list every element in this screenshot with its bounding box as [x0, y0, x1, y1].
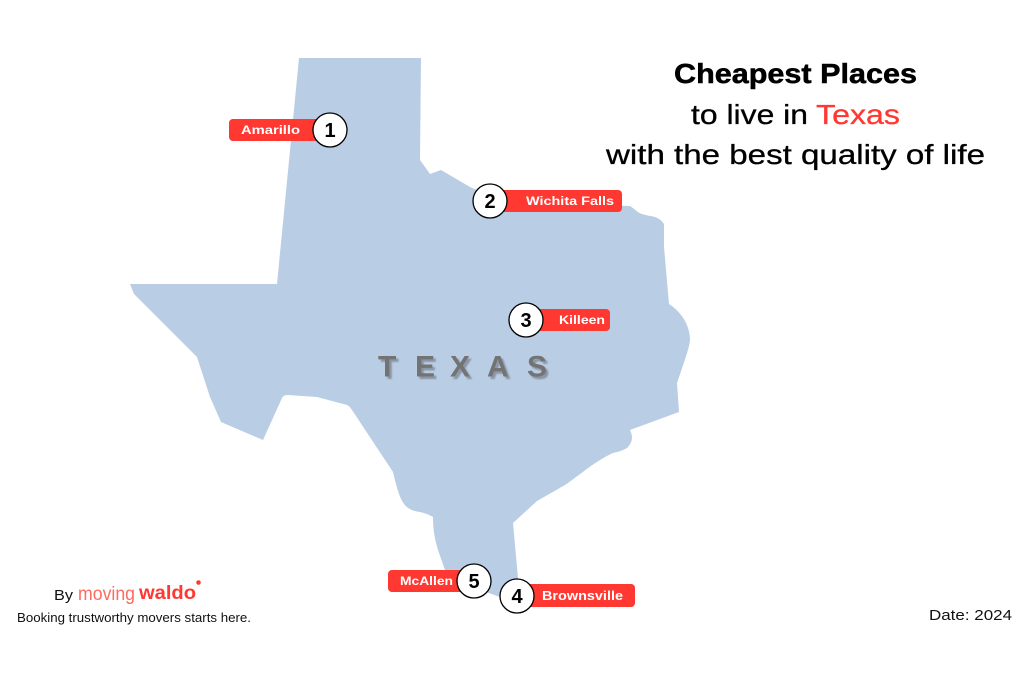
title: Texas — [816, 99, 900, 130]
marker 5: McAllen: 5 — [468, 571, 480, 593]
date: Date: 2024 — [929, 607, 1012, 624]
marker 1: Amarillo — [229, 113, 347, 147]
brand logo: By moving waldo: waldo — [138, 583, 196, 604]
marker 3: Killeen — [509, 303, 610, 337]
title: to live in — [691, 99, 808, 130]
marker 4: Brownsville: Brownsville — [542, 589, 623, 603]
brand logo: By moving waldo — [54, 580, 201, 605]
title: with the best quality of life — [605, 139, 985, 170]
marker 3: Killeen: 3 — [520, 310, 532, 332]
marker 5: McAllen: McAllen — [400, 574, 453, 588]
marker 4: Brownsville: 4 — [511, 586, 523, 608]
marker 2: Wichita Falls — [473, 184, 622, 218]
title: Cheapest Places — [674, 58, 917, 89]
map label: TEXAS: TEXAS — [380, 353, 550, 386]
marker 2: Wichita Falls: 2 — [484, 191, 496, 213]
marker 5: McAllen — [388, 564, 491, 598]
brand logo: By moving waldo: moving — [78, 584, 135, 605]
title — [605, 58, 985, 170]
marker 2: Wichita Falls: Wichita Falls — [526, 194, 614, 208]
tagline: Booking trustworthy movers starts here. — [17, 611, 251, 625]
marker 4: Brownsville — [500, 579, 635, 613]
map: Texas silhouette — [130, 58, 690, 598]
map label: TEXAS: TEXAS — [378, 350, 547, 384]
brand logo: By moving waldo: By — [54, 587, 74, 604]
marker 1: Amarillo: Amarillo — [241, 123, 300, 137]
marker 3: Killeen: Killeen — [559, 313, 605, 327]
marker 1: Amarillo: 1 — [324, 120, 336, 142]
